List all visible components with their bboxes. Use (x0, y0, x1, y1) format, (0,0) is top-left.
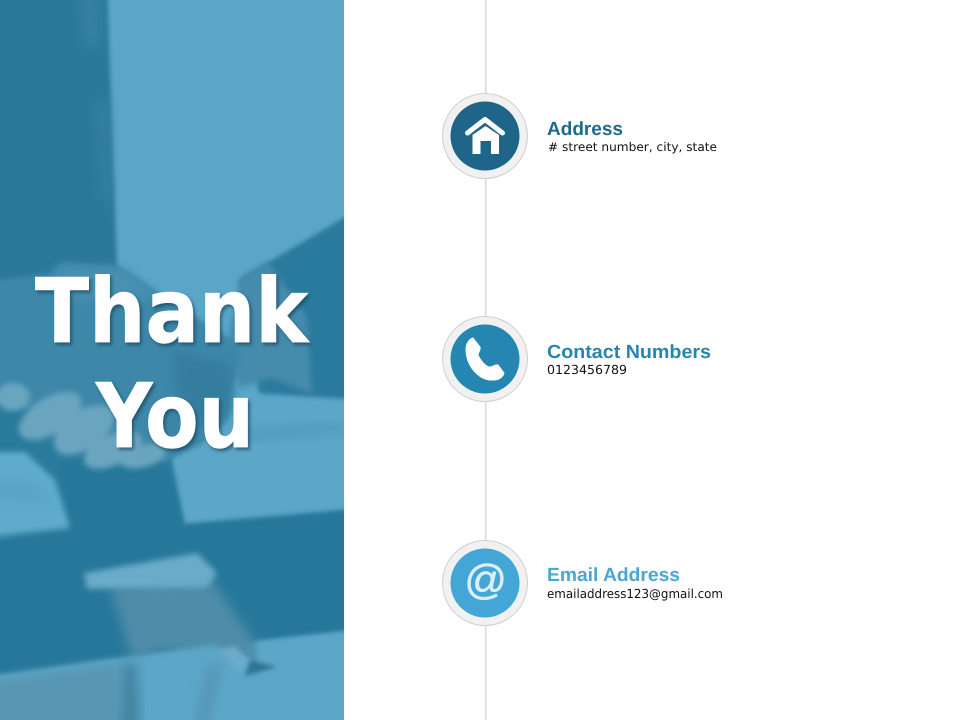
address heading: Address (547, 119, 623, 140)
panel: handshake photo with blue tint (0, 0, 364, 720)
fingers (0, 382, 169, 477)
item: contact numbers (442, 316, 711, 402)
address text: # street number, city, state (548, 140, 717, 154)
lower dark desk band (0, 507, 344, 676)
icon: at sign (442, 540, 528, 626)
dark suit top left (0, 0, 119, 300)
right side table (258, 392, 344, 406)
contact heading: Contact Numbers (547, 342, 711, 363)
right sleeve (256, 216, 344, 400)
item: email address (442, 540, 723, 626)
icon: phone (442, 316, 528, 402)
icon: at sign: @ (464, 556, 506, 603)
lower hand with pen (108, 578, 258, 661)
email heading: Email Address (547, 565, 680, 586)
timeline vertical line (485, 0, 486, 720)
title: Thank You: You (95, 364, 254, 468)
left dark wall below arm (0, 400, 185, 540)
slide canvas (0, 0, 722, 720)
clasped hands (0, 262, 240, 462)
item: address (442, 94, 717, 178)
email text: emailaddress123@gmail.com (547, 586, 723, 601)
pen and fingertip (220, 646, 250, 671)
cuff (226, 262, 312, 394)
icon: house (442, 94, 528, 178)
contact number: 0123456789 (547, 362, 627, 377)
upper left paper (0, 452, 70, 538)
title: Thank You: Thank (35, 259, 310, 363)
title: Thank You (35, 259, 310, 468)
bottom desk (0, 630, 344, 676)
